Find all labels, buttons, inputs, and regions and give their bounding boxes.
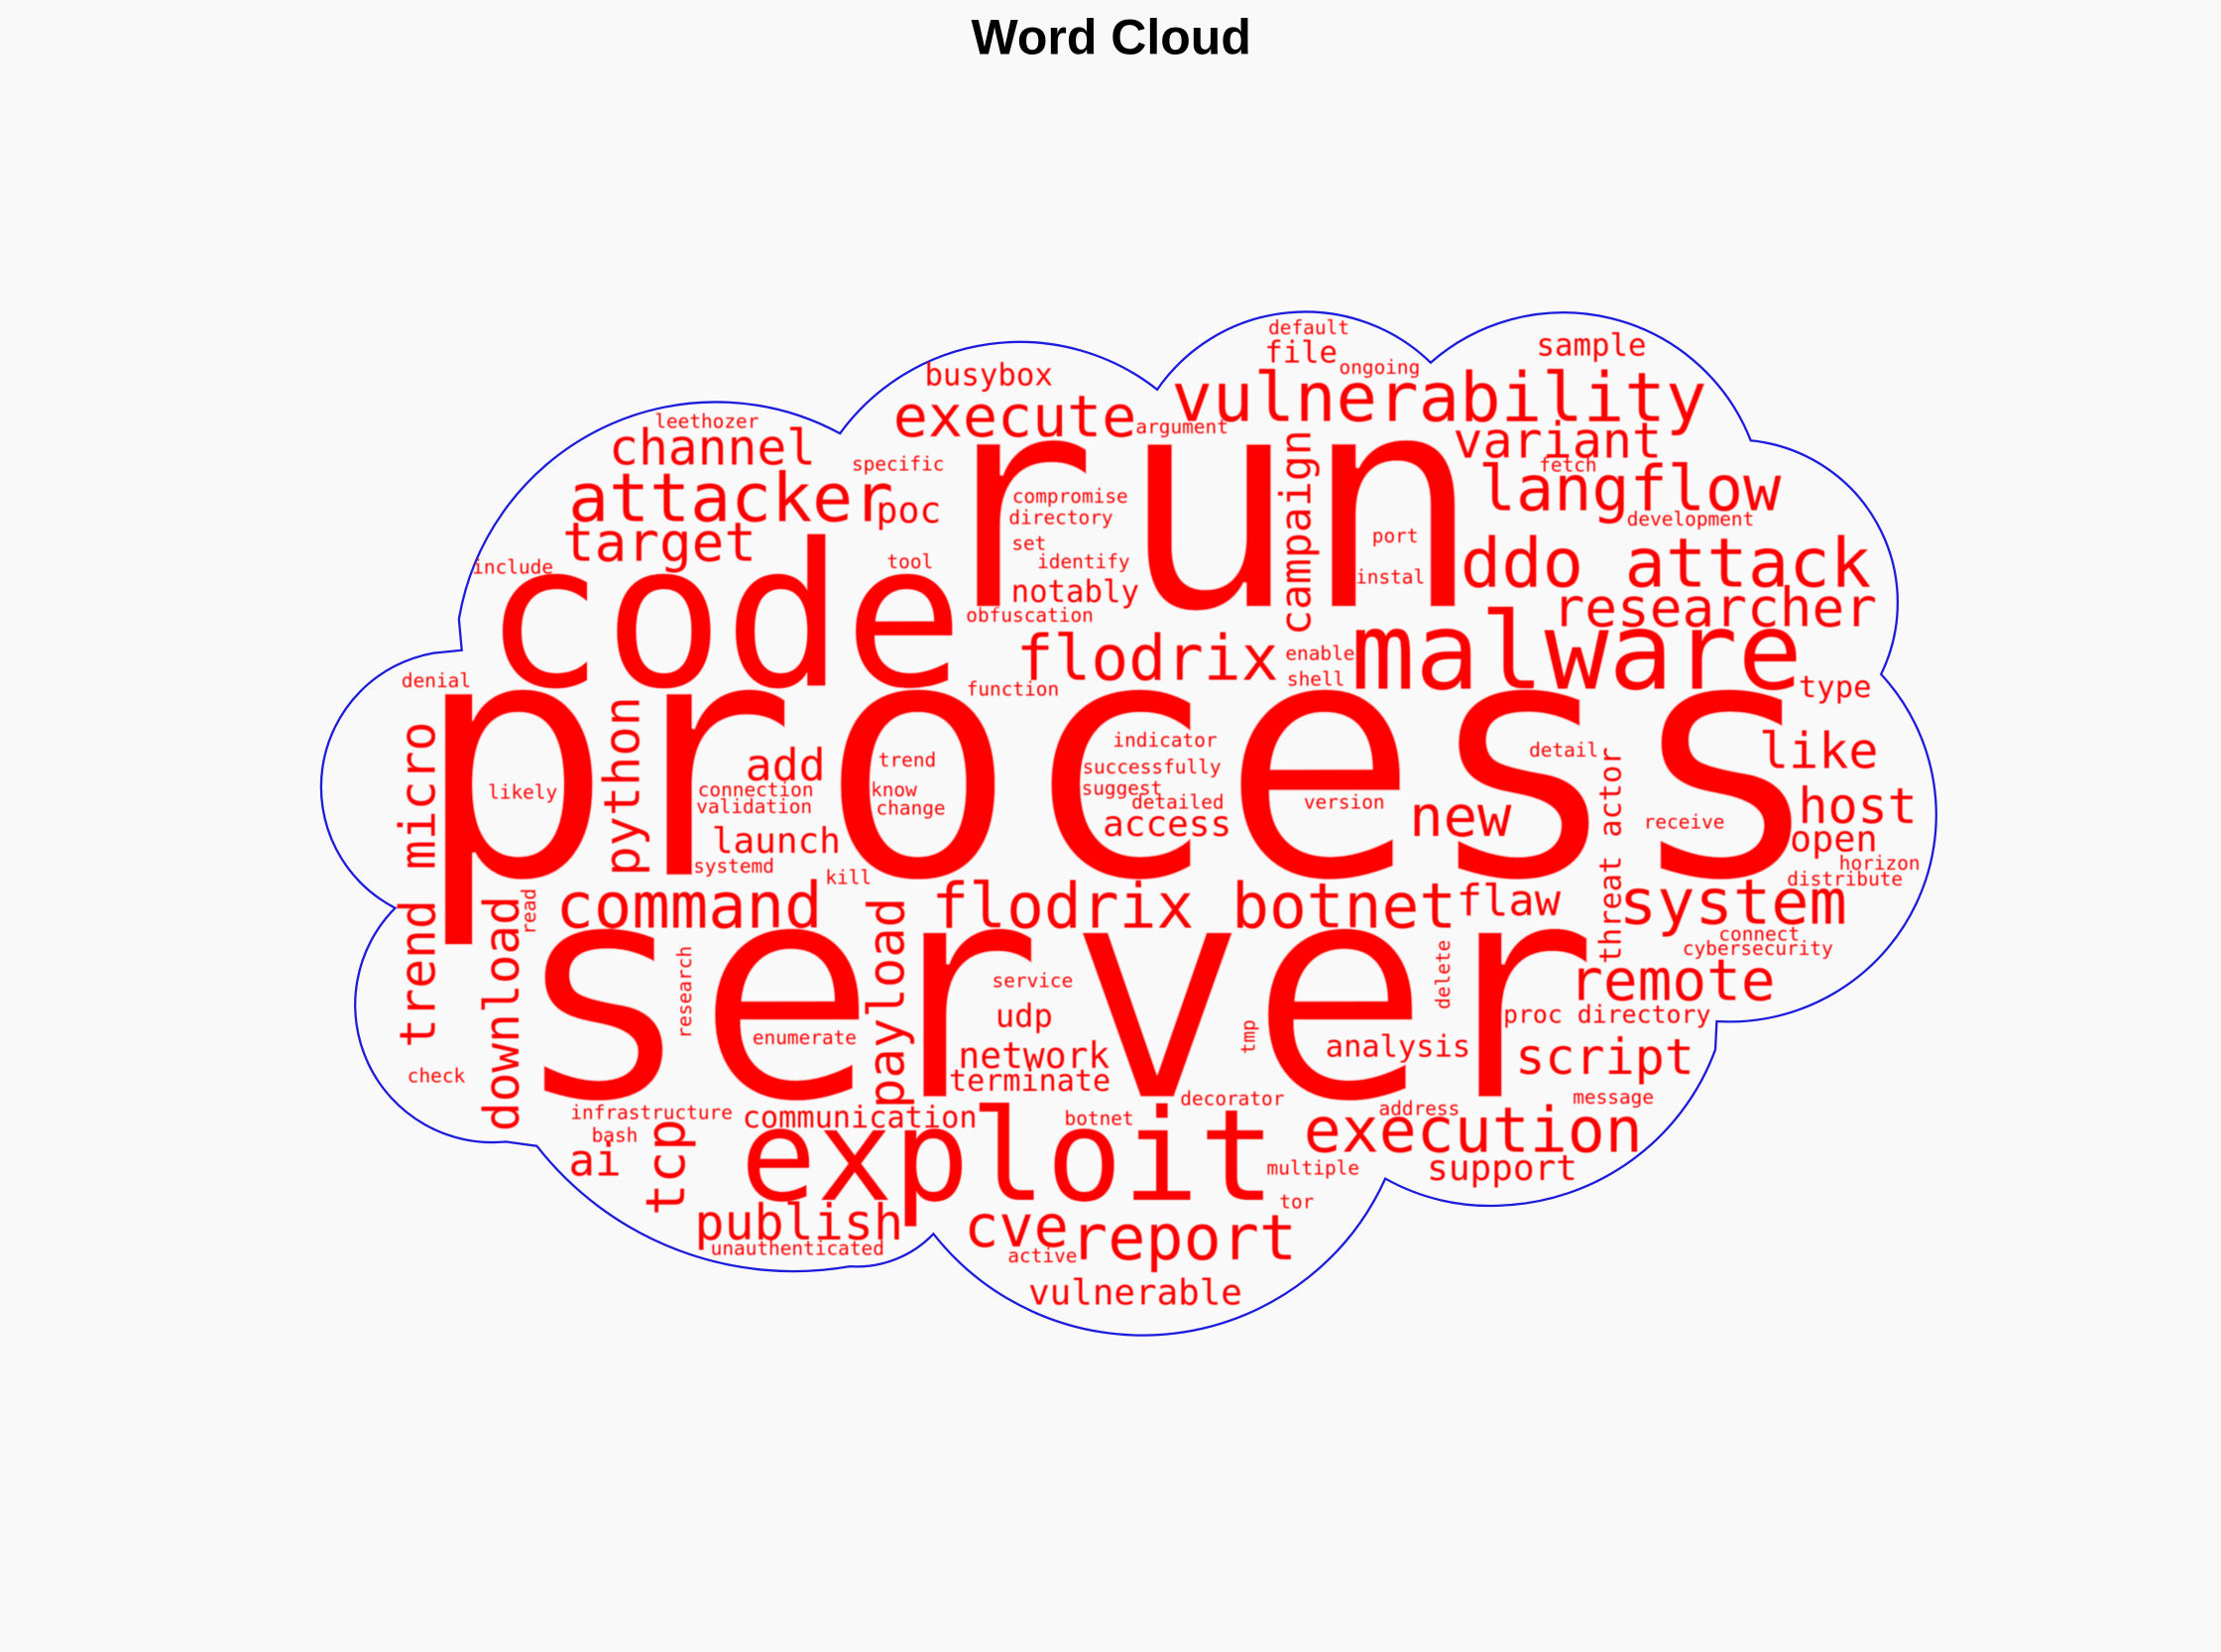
word: compromise: compromise bbox=[1012, 485, 1128, 508]
word: detail: detail bbox=[1529, 739, 1598, 762]
small words bbox=[402, 316, 1921, 1267]
word: process: r bbox=[610, 566, 798, 956]
word: ongoing: ongoing bbox=[1340, 356, 1420, 379]
word: flodrix botnet: flodrix botnet bbox=[931, 871, 1457, 943]
word: campaign: campaign bbox=[1271, 429, 1321, 636]
word: flodrix: flodrix bbox=[1016, 623, 1279, 695]
word: run: n bbox=[1302, 328, 1483, 679]
word: tool: tool bbox=[886, 550, 933, 573]
word: server bbox=[511, 816, 1599, 1170]
word: process: p bbox=[412, 565, 615, 956]
word: launch: launch bbox=[712, 821, 841, 862]
word: new: new bbox=[1409, 784, 1512, 850]
title: Word Cloud bbox=[972, 9, 1251, 64]
word: host: host bbox=[1798, 777, 1918, 835]
word: process: e bbox=[1220, 565, 1421, 956]
word: langflow: langflow bbox=[1478, 451, 1782, 525]
word: development: development bbox=[1627, 508, 1754, 531]
word: analysis: analysis bbox=[1326, 1030, 1470, 1065]
word: message: message bbox=[1573, 1086, 1654, 1109]
word: obfuscation: obfuscation bbox=[966, 604, 1094, 627]
word: set: set bbox=[1011, 531, 1046, 554]
word: horizon: horizon bbox=[1839, 852, 1921, 875]
word: enumerate: enumerate bbox=[753, 1026, 857, 1049]
word: server: r bbox=[872, 816, 1044, 1170]
word: access: access bbox=[1103, 804, 1231, 845]
word: busybox: busybox bbox=[924, 358, 1053, 394]
word: channel: channel bbox=[609, 419, 816, 477]
word: process: s bbox=[1422, 565, 1624, 956]
word: proc directory: proc directory bbox=[1503, 1000, 1710, 1028]
word: execution: execution bbox=[1304, 1093, 1643, 1166]
word: tor: tor bbox=[1279, 1191, 1314, 1214]
word: command: command bbox=[555, 871, 823, 944]
word: download: download bbox=[473, 895, 530, 1131]
word: server: r bbox=[1427, 816, 1599, 1170]
word: identify: identify bbox=[1037, 550, 1130, 573]
word: suggest: suggest bbox=[1082, 776, 1162, 799]
word: tcp: tcp bbox=[635, 1119, 697, 1216]
word cloud bbox=[390, 316, 1921, 1314]
word: add: add bbox=[746, 739, 826, 791]
word: execute: execute bbox=[893, 383, 1136, 450]
word: instal: instal bbox=[1355, 566, 1425, 589]
word: tmp: tmp bbox=[1237, 1019, 1260, 1054]
word: read: read bbox=[518, 888, 540, 935]
word: service: service bbox=[993, 970, 1073, 993]
word: terminate: terminate bbox=[949, 1064, 1110, 1099]
word: unauthenticated: unauthenticated bbox=[711, 1238, 884, 1260]
word: specific: specific bbox=[852, 452, 944, 475]
word: remote: remote bbox=[1569, 947, 1776, 1014]
word: kill: kill bbox=[825, 866, 872, 888]
word: research: research bbox=[673, 946, 696, 1038]
word: network: network bbox=[958, 1034, 1110, 1077]
word: vulnerable: vulnerable bbox=[1028, 1273, 1242, 1314]
word: run: u bbox=[1117, 328, 1299, 679]
word: address: address bbox=[1379, 1097, 1460, 1120]
word: port: port bbox=[1372, 525, 1419, 547]
word: open: open bbox=[1790, 818, 1878, 861]
word: target: target bbox=[562, 512, 757, 574]
word: attacker: attacker bbox=[568, 460, 893, 538]
word: server: e bbox=[1248, 816, 1432, 1170]
word: poc: poc bbox=[877, 489, 941, 531]
word: process bbox=[412, 565, 1826, 956]
word: threat actor: threat actor bbox=[1593, 748, 1628, 964]
word: denial: denial bbox=[402, 669, 471, 692]
word: sample: sample bbox=[1537, 328, 1646, 364]
word: process: c bbox=[1018, 565, 1220, 956]
word: systemd: systemd bbox=[693, 855, 774, 878]
word: run: r bbox=[924, 328, 1099, 679]
word: change: change bbox=[877, 796, 946, 819]
word: fetch: fetch bbox=[1539, 454, 1597, 477]
word: type: type bbox=[1799, 670, 1872, 705]
word: receive: receive bbox=[1644, 811, 1724, 834]
word: bash: bash bbox=[592, 1123, 638, 1146]
word: variant: variant bbox=[1453, 412, 1662, 469]
word: like: like bbox=[1759, 722, 1878, 779]
word: publish: publish bbox=[694, 1194, 903, 1251]
word: distribute: distribute bbox=[1787, 868, 1903, 890]
word: version: version bbox=[1304, 791, 1385, 814]
word: trend micro: trend micro bbox=[390, 722, 447, 1048]
word: ddo attack: ddo attack bbox=[1461, 524, 1871, 603]
word: process: o bbox=[817, 565, 1019, 956]
word: infrastructure: infrastructure bbox=[570, 1102, 733, 1124]
word: server: s bbox=[511, 816, 694, 1170]
word: file: file bbox=[1264, 336, 1338, 371]
word: function: function bbox=[967, 677, 1059, 700]
word: notably: notably bbox=[1011, 574, 1139, 610]
word: process: s bbox=[1624, 565, 1826, 956]
word: vulnerability: vulnerability bbox=[1171, 358, 1706, 437]
word: communication: communication bbox=[743, 1101, 978, 1135]
word: server: v bbox=[1066, 816, 1249, 1170]
word: delete: delete bbox=[1432, 940, 1455, 1009]
word: script: script bbox=[1515, 1028, 1695, 1086]
word: python: python bbox=[592, 696, 650, 877]
word: code: code bbox=[484, 501, 964, 733]
word: udp: udp bbox=[995, 998, 1053, 1035]
word: shell: shell bbox=[1287, 667, 1344, 690]
word: validation: validation bbox=[696, 795, 812, 818]
word: enable: enable bbox=[1285, 643, 1354, 665]
word: exploit: exploit bbox=[740, 1083, 1275, 1231]
word: include: include bbox=[472, 556, 553, 579]
word: trend: trend bbox=[878, 749, 936, 771]
word: run bbox=[924, 328, 1483, 679]
word: server: e bbox=[695, 816, 878, 1170]
word: botnet: botnet bbox=[1065, 1107, 1134, 1129]
word: support: support bbox=[1427, 1148, 1578, 1189]
word: cve: cve bbox=[964, 1193, 1069, 1260]
word: detailed: detailed bbox=[1131, 791, 1225, 814]
word: indicator: indicator bbox=[1112, 729, 1218, 752]
word: default: default bbox=[1268, 316, 1349, 339]
word: report: report bbox=[1070, 1201, 1297, 1274]
word: payload: payload bbox=[857, 897, 915, 1109]
word: check: check bbox=[408, 1064, 466, 1087]
word: connection: connection bbox=[698, 778, 814, 801]
word: cybersecurity: cybersecurity bbox=[1683, 937, 1833, 960]
word: leethozer: leethozer bbox=[654, 410, 759, 432]
word: active: active bbox=[1007, 1244, 1077, 1267]
word: flaw: flaw bbox=[1457, 876, 1562, 926]
word: connect: connect bbox=[1718, 923, 1800, 946]
word: malware: malware bbox=[1350, 589, 1803, 714]
word: argument: argument bbox=[1135, 415, 1228, 438]
word: know: know bbox=[871, 778, 917, 801]
word: decorator: decorator bbox=[1180, 1087, 1284, 1110]
word: successfully: successfully bbox=[1082, 756, 1222, 778]
word: researcher: researcher bbox=[1553, 575, 1877, 639]
cloud outline bbox=[321, 311, 1936, 1336]
word: ai: ai bbox=[568, 1136, 622, 1187]
word: likely: likely bbox=[488, 781, 557, 804]
word: system: system bbox=[1619, 866, 1847, 939]
word: directory: directory bbox=[1008, 507, 1113, 530]
word: multiple: multiple bbox=[1267, 1156, 1359, 1179]
